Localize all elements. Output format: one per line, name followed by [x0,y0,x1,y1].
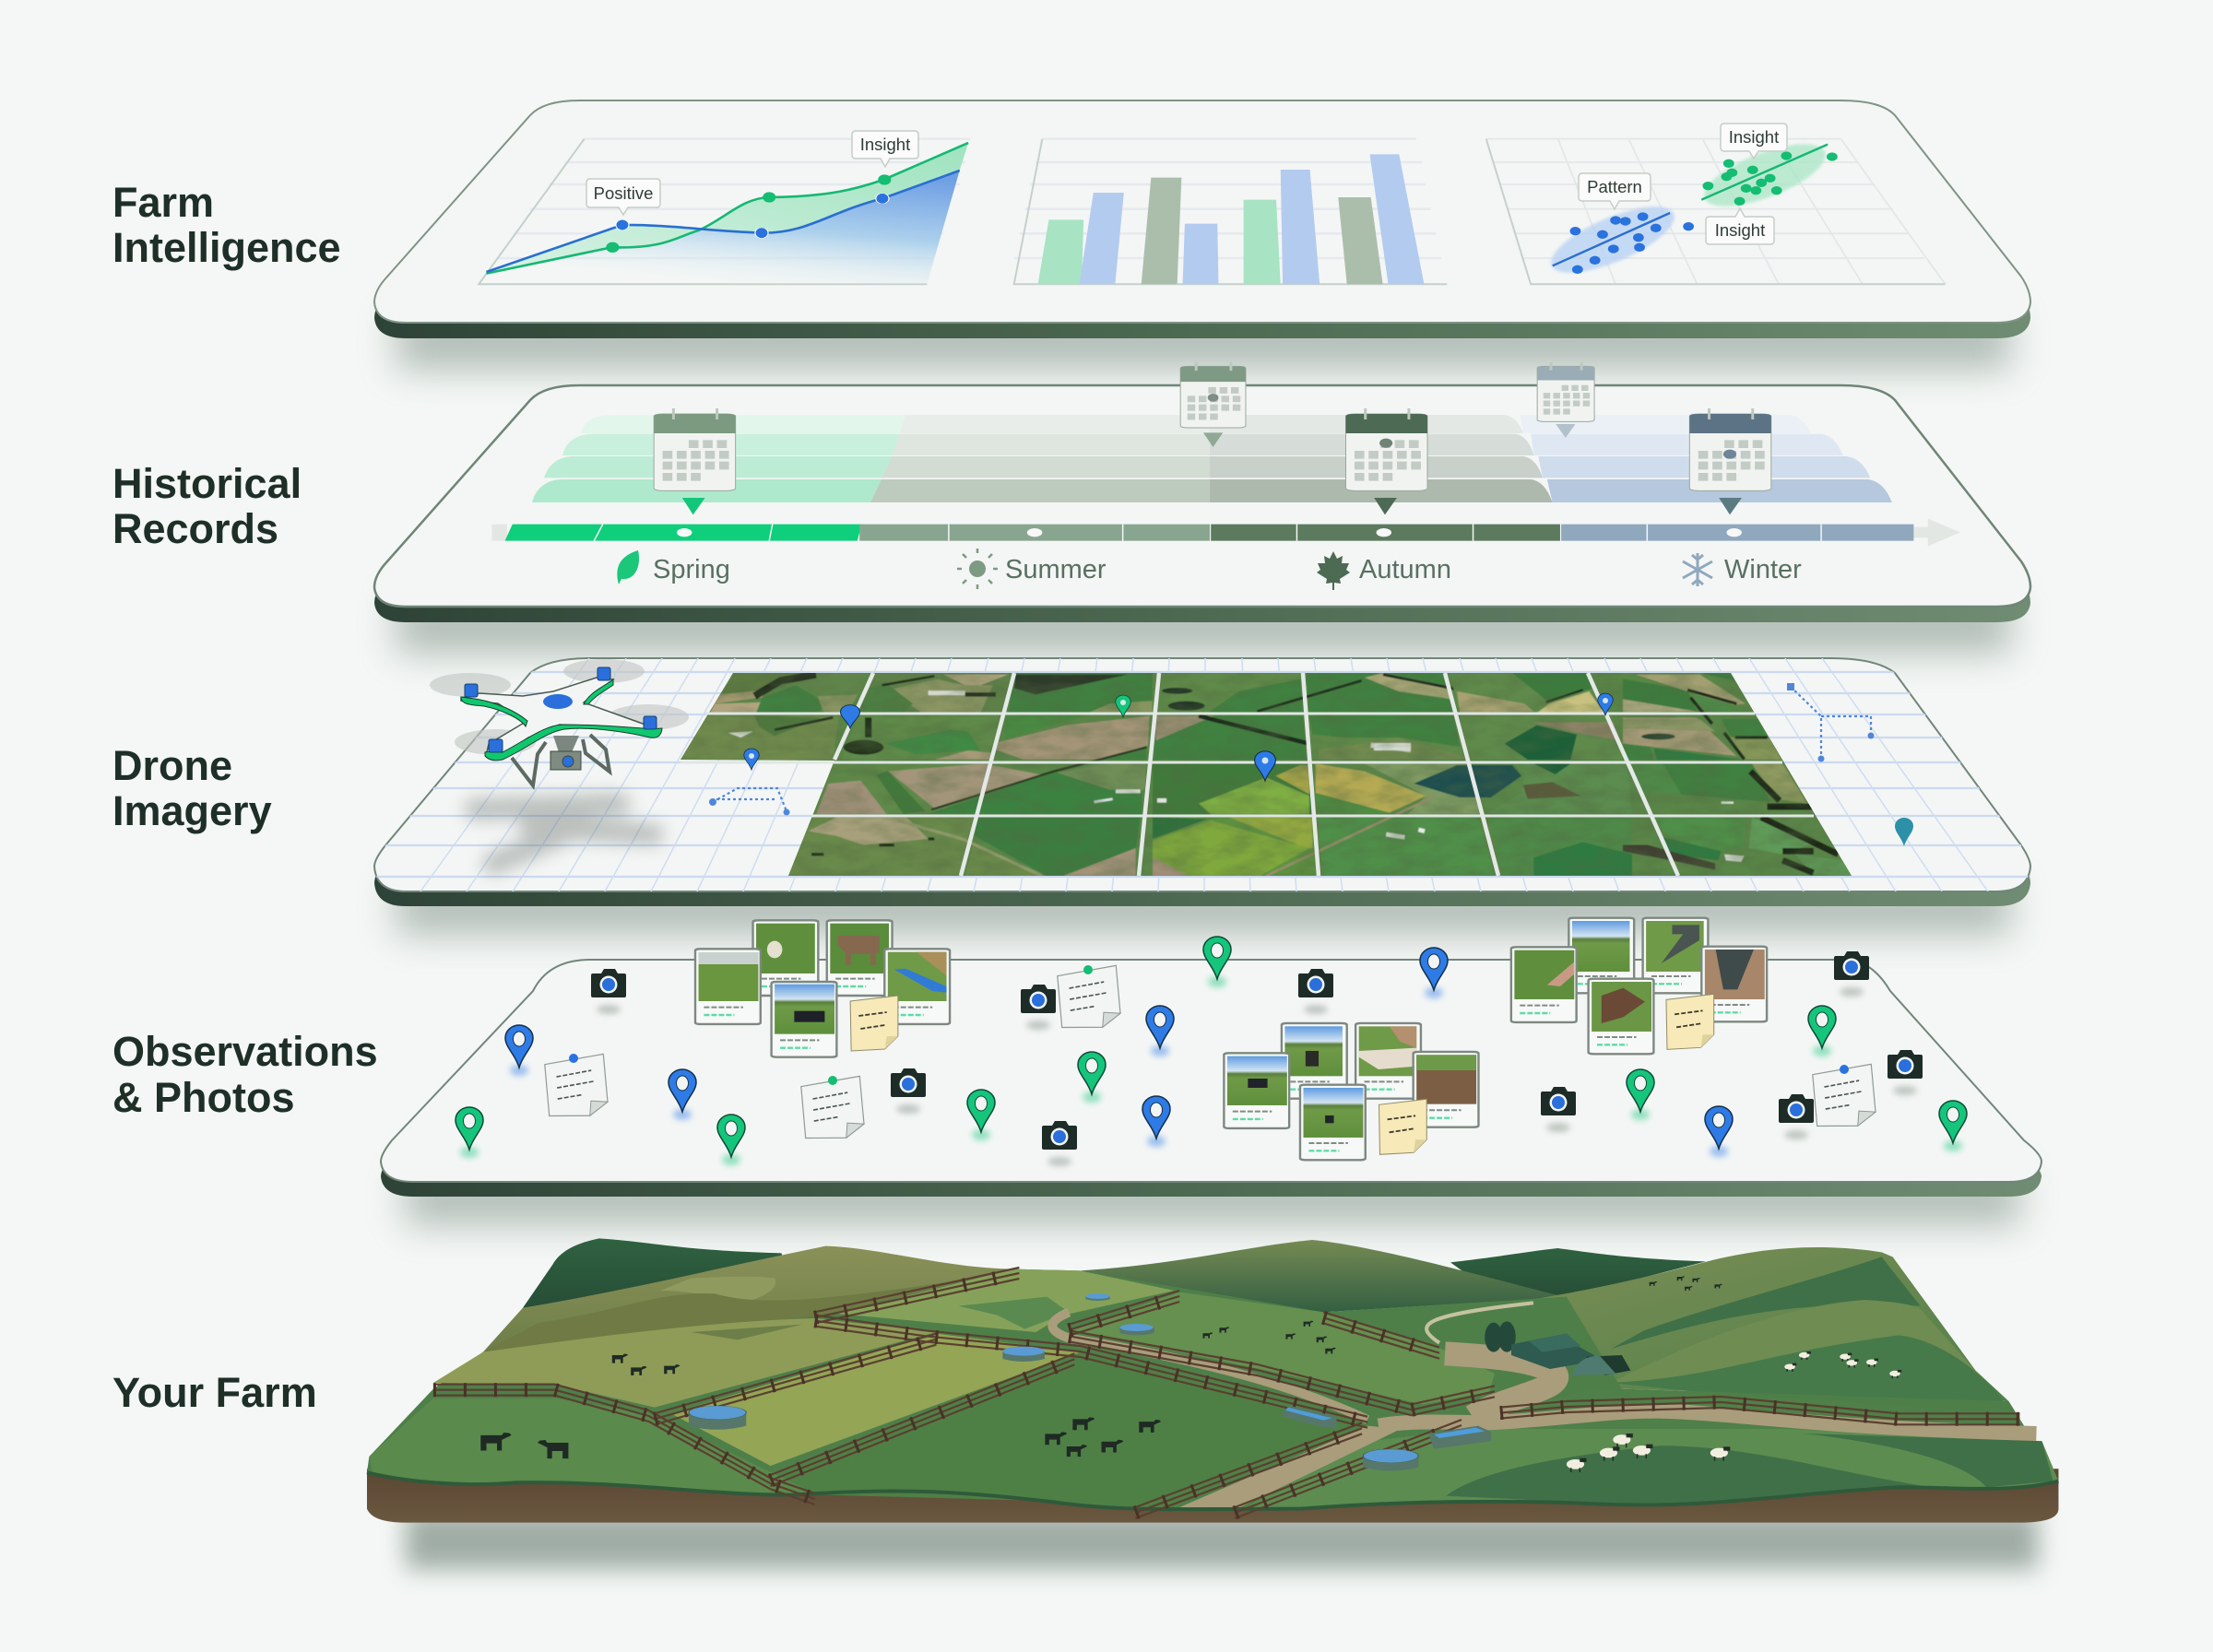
season label: Winter: Winter [1724,555,1802,584]
panel: farm intelligence [374,100,2030,369]
panel: drone imagery [369,658,2038,934]
line chart [479,139,970,284]
photo cluster right [1511,918,1767,1054]
seasonal stacked bands [532,415,1892,502]
pasture fields [367,1269,2058,1509]
layer label: Drone Imagery: Drone [112,742,232,789]
callout: Insight lower [1706,208,1774,244]
season label: Summer: Summer [1005,555,1106,584]
scatter plot [1486,132,1946,286]
season label: Autumn [1317,551,1451,590]
farm roads [1052,1303,2036,1507]
dashed flight paths [713,687,1871,811]
layer label: Observations & Photos: Observations [112,1028,378,1075]
callout: Pattern: Pattern [1587,177,1642,196]
flight path nodes [709,683,1874,815]
drone shadow [475,804,653,864]
season label: Winter [1683,553,1802,586]
back hills [483,1238,2008,1401]
aerial fields: east [1623,673,1852,876]
season label: Autumn: Autumn [1359,555,1451,584]
photo cluster left [695,920,950,1057]
calendar markers [654,362,1771,514]
water tanks and troughs [689,1293,1491,1470]
pinned field notes [544,965,1876,1140]
layer label: Historical Records: Records [112,505,278,552]
callout: Insight upper [1721,124,1787,159]
callout: Insight lower: Insight [1715,220,1765,240]
callout: Positive [586,179,660,215]
blue location pins [505,948,1733,1157]
layer label: Historical Records: Historical [112,460,302,507]
season label: Spring [617,550,730,584]
layer label: Farm Intelligence: Farm [112,179,214,226]
panel: observations and photos [381,918,2041,1224]
callout: Positive: Positive [594,183,653,203]
layer label: Farm Intelligence: Intelligence [112,224,341,271]
green location pins [456,937,1967,1165]
season label: Summer [957,549,1106,589]
callout: Insight upper: Insight [1729,127,1779,147]
panel: historical records [374,362,2030,653]
sheep [1567,1351,1901,1472]
map pins on imagery [744,693,1913,846]
camera icons [591,951,1923,1166]
aerial fields: west [680,673,1153,876]
aerial farmland image [673,668,1863,880]
layer label: Your Farm: Your Farm [112,1369,317,1416]
vertical image grid lines [834,673,1678,876]
cattle [480,1276,1722,1458]
season label: Spring: Spring [653,555,730,584]
soil block [367,1469,2058,1523]
callout: Insight: Insight [860,135,910,154]
perspective grid [369,658,2038,891]
timeline bar [491,519,1960,547]
soil edge rim [367,1472,2058,1509]
image grid lines [680,714,1814,816]
barn buildings and trees [1485,1321,1630,1375]
callout: Insight [852,131,918,167]
wooden fences [433,1268,2019,1518]
callout: Pattern [1579,173,1651,209]
panel: your farm landscape [367,1238,2058,1569]
aerial fields: centre [1153,673,1632,876]
layer label: Drone Imagery: Imagery [112,787,272,834]
drone [430,659,689,785]
layer label: Observations & Photos: & Photos [112,1074,295,1121]
photo cluster centre [1224,1023,1478,1160]
bar chart [1014,139,1447,284]
